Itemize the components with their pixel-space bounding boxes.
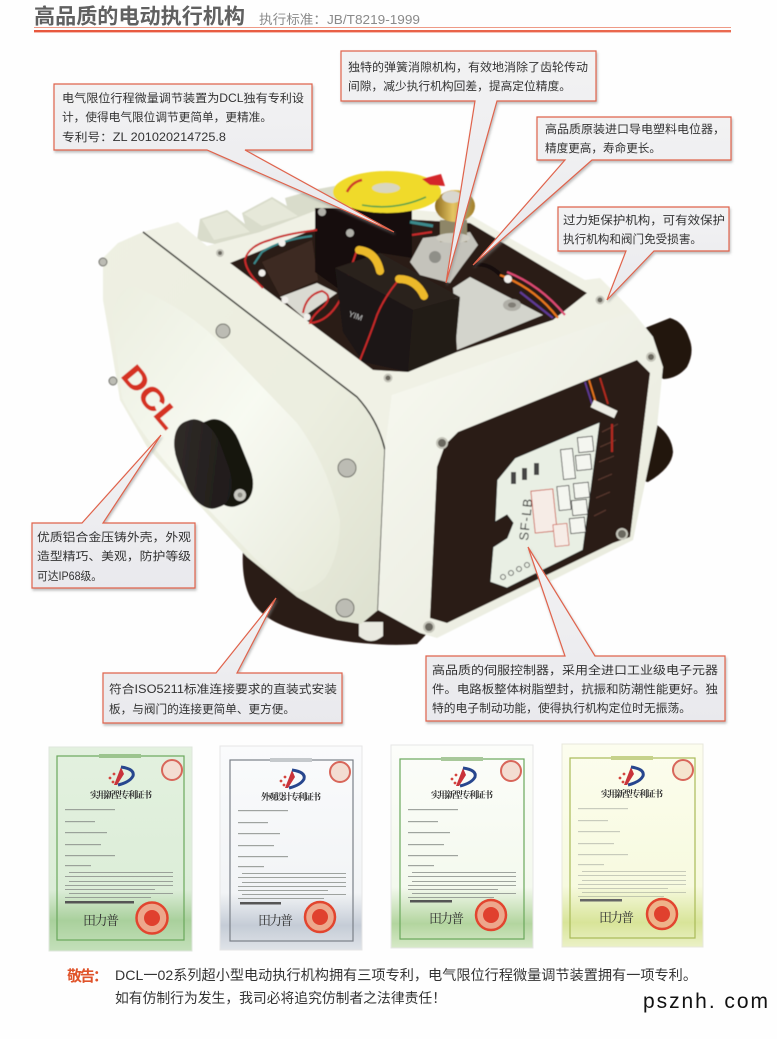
mounting base disc (243, 540, 440, 645)
red seal (647, 899, 677, 929)
capacitor: YIM (347, 309, 364, 323)
callout: die-cast housing (32, 435, 195, 588)
callout: die-cast housing: 优质铝合金压铸外壳，外观 (37, 530, 191, 544)
right controller face (378, 312, 663, 638)
red seal (136, 902, 168, 934)
certificate title: 实用新型专利证书 (90, 789, 153, 800)
watermark: psznh. com (643, 990, 768, 1013)
controller label SF-LB: SF-LB (516, 498, 535, 541)
certificate title: 外观设计专利证书 (261, 791, 322, 802)
header rule (34, 27, 731, 32)
casting: left (280, 283, 337, 317)
header (34, 4, 731, 32)
callout: servo controller: 特的电子制动功能，使得执行机构定位时无振荡。 (432, 701, 691, 715)
callout: over-torque protection: 过力矩保护机构，可有效保护 (563, 213, 725, 227)
callout: limit-switch adjuster: 电气限位行程微量调节装置为DCL独有专利设 (62, 91, 304, 105)
certificate title: 实用新型专利证书 (431, 789, 494, 800)
notice label: 敬告： (67, 967, 108, 985)
callout: ISO5211 mounting plate (103, 598, 342, 723)
cable gland: upper (640, 318, 692, 379)
top flourish (611, 756, 653, 760)
black knob (166, 413, 261, 515)
small stamp (330, 762, 350, 782)
certificate 1 (49, 747, 192, 951)
callout: die-cast housing: 造型精巧、美观，防护等级 (37, 549, 191, 563)
callout: potentiometer (473, 117, 731, 265)
patent logo (280, 770, 304, 788)
rear cooling ribs (197, 184, 350, 252)
top flourish (99, 754, 141, 758)
black limit-switch block (315, 208, 412, 290)
certificate 3 (391, 745, 533, 948)
patent logo (451, 768, 475, 786)
controller compartment (430, 360, 650, 623)
callout: servo controller: 件。电路板整体树脂塑封，抗振和防潮性能更好。独 (432, 682, 718, 696)
certificate title: 实用新型专利证书 (601, 788, 664, 799)
yellow limit dial (333, 171, 445, 213)
cable ties (258, 240, 310, 320)
callout: over-torque protection (558, 207, 729, 300)
casting: right (453, 277, 543, 350)
callout: ISO5211 mounting plate: 板，与阀门的连接更简单、更方便。 (109, 702, 295, 716)
signature: 田力普 (429, 911, 464, 926)
callout: anti-backlash spring (341, 51, 596, 283)
bracket screws (318, 208, 354, 237)
small stamp (162, 760, 182, 780)
controller label SF-LB (490, 422, 600, 588)
top deck frame (143, 205, 653, 450)
callout: limit-switch adjuster: 专利号：ZL 201020214725.8 (62, 130, 226, 144)
red seal (305, 902, 335, 932)
wire tie: right (504, 275, 512, 283)
callout: ISO5211 mounting plate: 符合ISO5211标准连接要求的直装式安装 (109, 682, 337, 696)
notice: 如有仿制行为发生，我司必将追究仿制者之法律责任！ (115, 990, 446, 1006)
callout: limit-switch adjuster (54, 84, 394, 232)
brown insulation block (262, 240, 318, 296)
multicolour wire bundle (473, 265, 565, 318)
callout: servo controller: 高品质的伺服控制器，采用全进口工业级电子元器 (432, 663, 718, 677)
housing screws (99, 258, 356, 617)
signature: 田力普 (83, 913, 119, 928)
mounting foot (359, 622, 383, 641)
notice (67, 967, 697, 1006)
top flourish (270, 758, 312, 762)
red seal (476, 900, 506, 930)
title: 高品质的电动执行机构 (34, 4, 245, 28)
callout: limit-switch adjuster: 计，使得电气限位调节更简单，更精准。 (62, 110, 272, 124)
callout: servo controller (426, 547, 725, 721)
left end-cover housing (103, 232, 385, 624)
red terminal marks (611, 424, 613, 452)
capacitor (335, 253, 460, 372)
notice text: DCL一02系列超小型电动执行机构拥有三项专利，电气限位行程微量调节装置拥有一项专利。 (115, 967, 697, 983)
red DCL logo: DCL (115, 359, 186, 436)
callout: over-torque protection: 执行机构和阀门免受损害。 (563, 232, 702, 246)
red and teal wiring (245, 222, 433, 323)
terminal strip (594, 424, 618, 516)
white connector (591, 400, 617, 418)
frame holes (217, 250, 655, 632)
certificate 2 (220, 746, 362, 950)
patent logo (619, 767, 643, 785)
certificate 4 (562, 744, 703, 947)
potentiometer plate and gear (410, 190, 478, 283)
signature: 田力普 (258, 913, 293, 928)
callout: die-cast housing: 可达IP68级。 (37, 569, 102, 583)
product photo: actuator (99, 171, 692, 645)
callout: potentiometer: 高品质原装进口导电塑料电位器， (545, 122, 725, 136)
callout: anti-backlash spring: 间隙，减少执行机构回差，提高定位精度。 (348, 79, 571, 93)
small stamp (501, 761, 521, 781)
callout: anti-backlash spring: 独特的弹簧消隙机构，有效地消除了齿轮传动 (348, 60, 588, 74)
cover seam (143, 232, 385, 610)
raised dome on cover (112, 287, 340, 592)
compartment wires (585, 378, 608, 404)
subtitle: standard: 执行标准：JB/T8219-1999 (259, 12, 420, 27)
signature: 田力普 (599, 910, 634, 925)
top flourish (441, 757, 483, 761)
callout: potentiometer: 精度更高，寿命更长。 (545, 141, 661, 155)
yellow terminal clips (359, 250, 424, 296)
cable gland: lower (636, 425, 673, 482)
top compartment interior (230, 171, 587, 372)
patent logo (109, 767, 133, 785)
small stamp (673, 760, 693, 780)
